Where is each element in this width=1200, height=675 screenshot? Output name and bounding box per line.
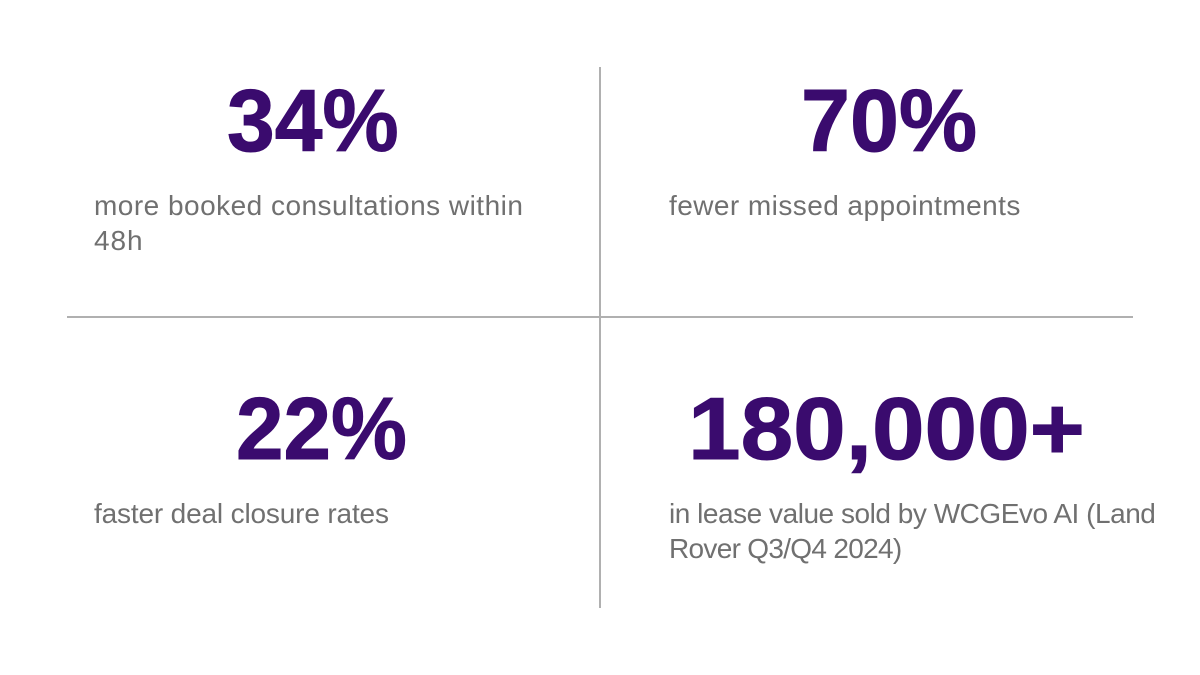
panel: 180,000+ stat [669, 379, 1155, 564]
stat number: 70%: 70% [801, 71, 977, 170]
vertical divider [599, 67, 601, 608]
stat description: lease value [669, 498, 1155, 564]
panel: 70% stat [669, 71, 1021, 221]
horizontal divider [67, 316, 1133, 318]
panel: 34% stat [94, 71, 523, 256]
stat description: deal closure: faster deal closure rates [94, 498, 389, 529]
stat number: 180,000+: 180,000+ [688, 379, 1085, 478]
panel: 22% stat [94, 379, 407, 529]
stat description: consultations: 48h [94, 225, 143, 256]
stat number: 22%: 22% [236, 379, 407, 478]
stat description: lease value: Rover Q3/Q4 2024) [669, 533, 901, 564]
stat number: 34%: 34% [227, 71, 399, 170]
stat description: lease value: in lease value sold by WCGEvo AI (Land [669, 498, 1155, 529]
stat description: consultations: more booked consultations within [94, 190, 523, 221]
stat description: consultations [94, 190, 523, 256]
stat description: appointments: fewer missed appointments [669, 190, 1021, 221]
